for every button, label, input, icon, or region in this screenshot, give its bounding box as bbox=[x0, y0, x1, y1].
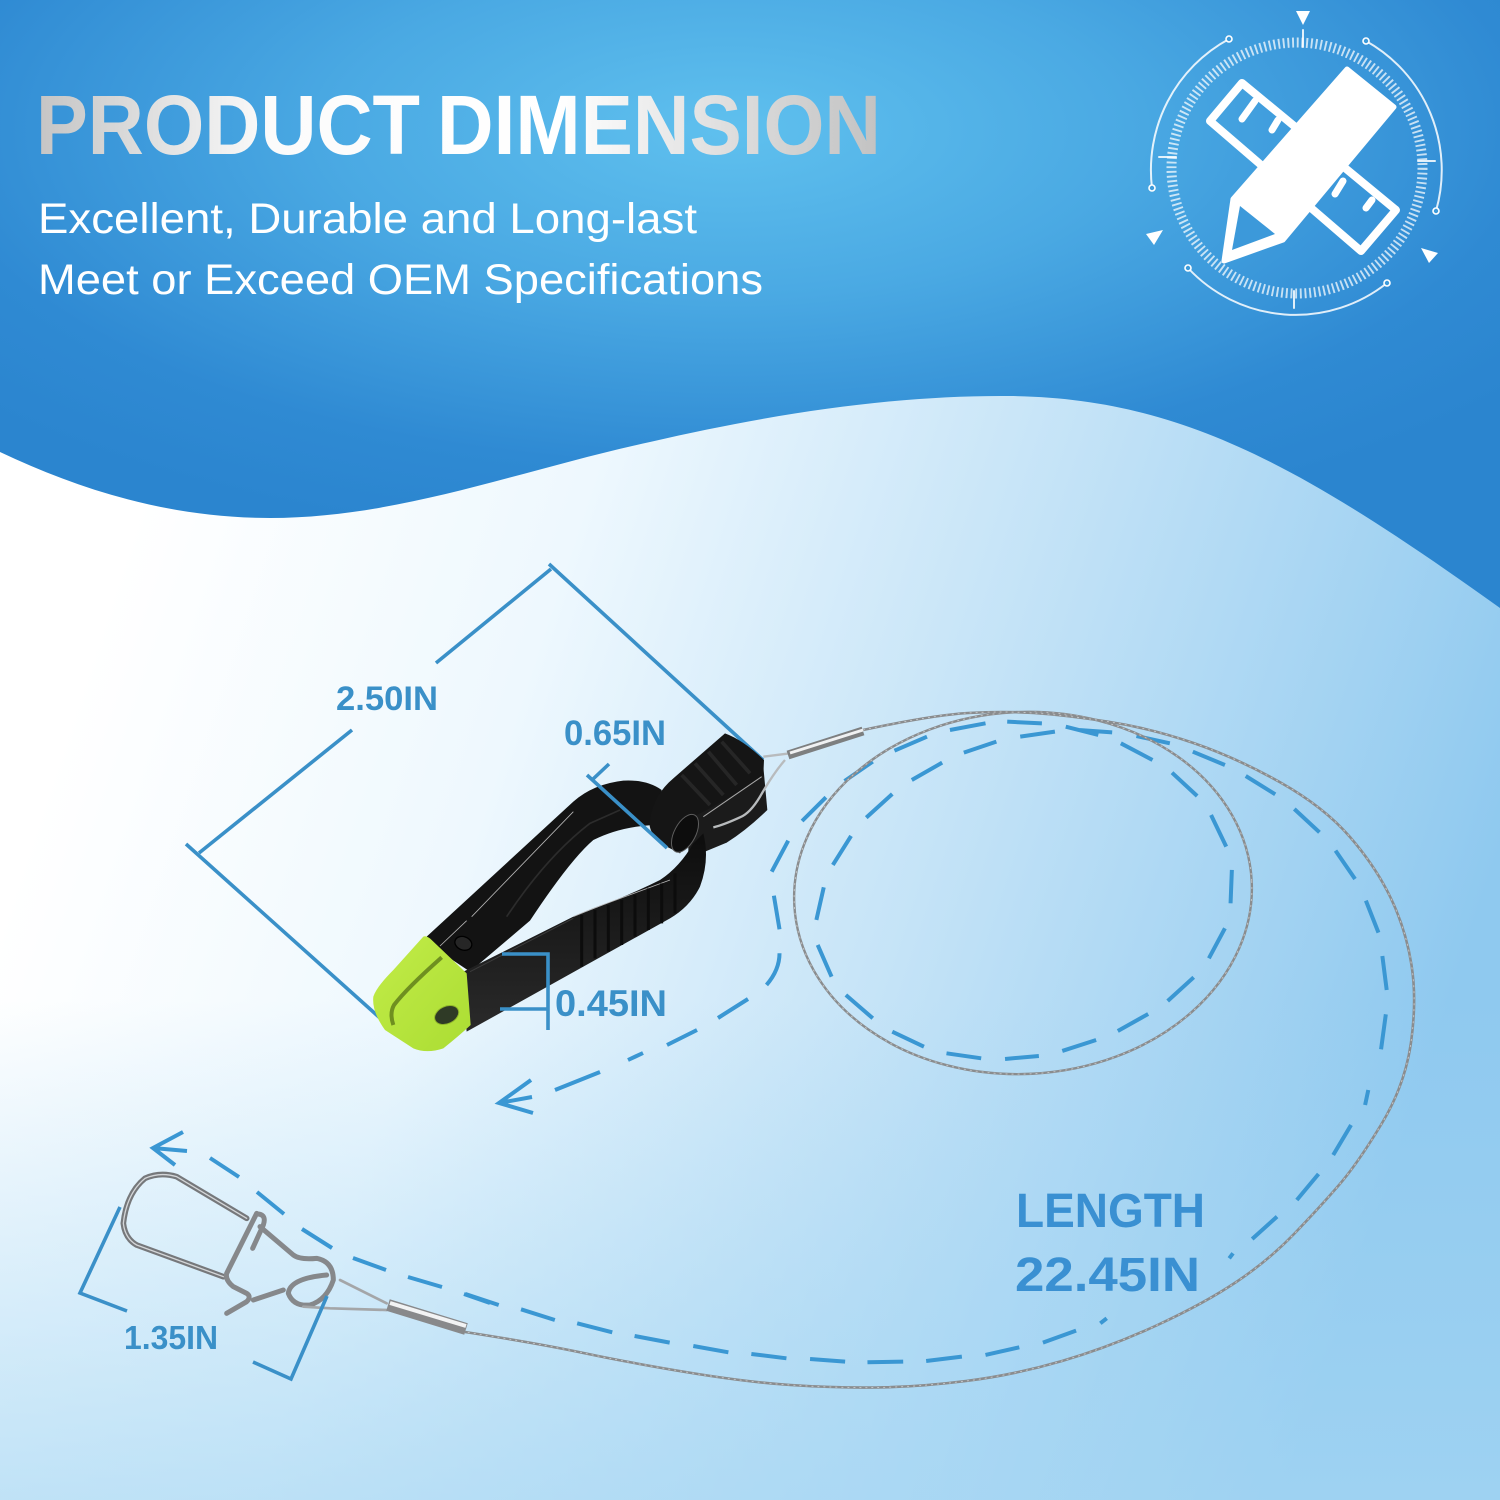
dimension 1.35 marker bbox=[80, 1207, 327, 1379]
length callout: 22.45IN bbox=[1015, 1249, 1200, 1302]
labels: 2.50IN bbox=[336, 680, 438, 718]
snap eye bbox=[253, 1227, 333, 1305]
clip ribs and edges bbox=[440, 810, 675, 972]
snap connector bbox=[123, 1175, 387, 1313]
subtitle: Excellent, Durable and Long-last bbox=[38, 195, 697, 243]
clip lower arm bbox=[460, 833, 706, 1032]
snap latch bbox=[226, 1213, 264, 1313]
clip pin bbox=[453, 934, 474, 953]
steel wire loop bbox=[785, 700, 1261, 1086]
snap wires bbox=[303, 1280, 387, 1310]
clip back plate bbox=[688, 767, 767, 854]
steel wire main run bbox=[465, 712, 1414, 1388]
ferrule near snap bbox=[388, 1303, 466, 1329]
clip upper arm bbox=[427, 781, 662, 972]
clip loop edge and wire bbox=[666, 753, 790, 857]
length callout bbox=[1015, 1185, 1205, 1302]
arrow: snap end of the route bbox=[153, 1132, 187, 1165]
title: PRODUCT bbox=[36, 78, 420, 172]
labels: 0.45IN bbox=[555, 983, 667, 1024]
snap body bbox=[123, 1175, 247, 1277]
clip tip hole bbox=[432, 1002, 462, 1028]
subtitle: Meet or Exceed OEM Specifications bbox=[38, 256, 763, 304]
title bbox=[36, 78, 881, 172]
icon: ruler and pencil dial bbox=[1146, 11, 1442, 315]
dimension 0.65 marker over clip bbox=[587, 764, 667, 848]
arrow: top end of the route bbox=[499, 1080, 533, 1113]
ferrule near clip bbox=[788, 730, 863, 755]
title: DIMENSION bbox=[437, 78, 881, 172]
labels: 1.35IN bbox=[124, 1319, 218, 1356]
clip tip groove bbox=[391, 957, 442, 1025]
product: clip bbox=[373, 733, 790, 1051]
subtitle bbox=[38, 195, 763, 304]
clip green tip bbox=[373, 936, 471, 1051]
labels: 0.65IN bbox=[564, 714, 666, 753]
clip head bbox=[650, 733, 764, 853]
snap highlight bbox=[123, 1175, 247, 1277]
clip head ribs bbox=[682, 742, 750, 805]
dashed route of the wire bbox=[210, 722, 1387, 1362]
dimension 0.45 marker bbox=[500, 954, 548, 1030]
labels bbox=[124, 680, 667, 1356]
top blue wave header bbox=[0, 0, 1500, 608]
length callout: LENGTH bbox=[1016, 1185, 1205, 1238]
dimension lines behind clip bbox=[186, 564, 763, 1018]
